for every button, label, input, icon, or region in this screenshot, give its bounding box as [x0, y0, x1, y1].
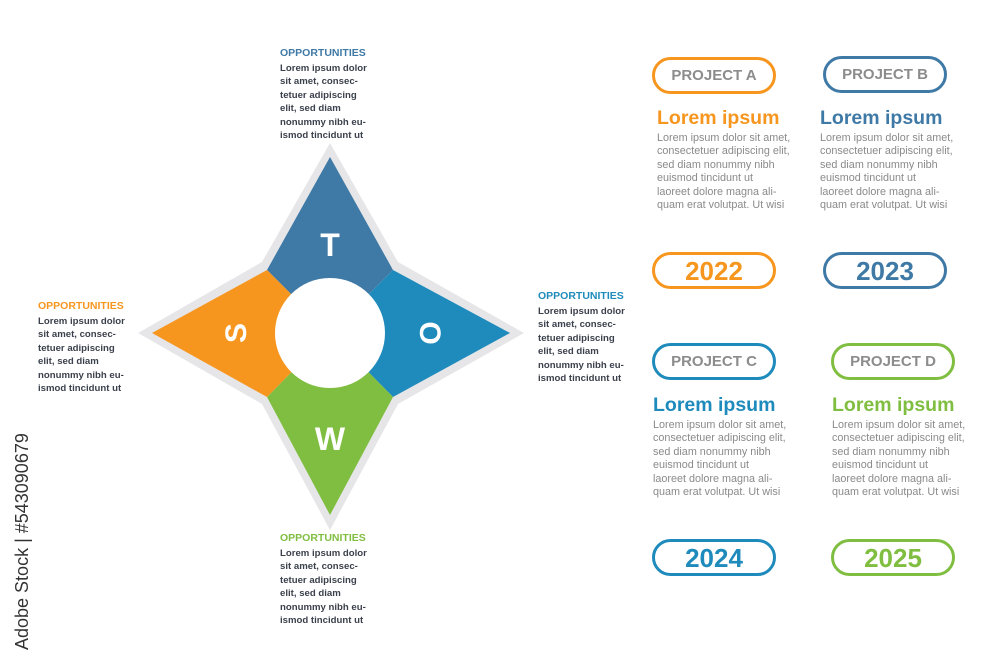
pill: project D: PROJECT D [850, 353, 936, 370]
card: project A text: euismod tincidunt ut [657, 172, 753, 184]
card: project A text: laoreet dolore magna ali- [657, 186, 776, 198]
text block: bottom opportunities: OPPORTUNITIES [280, 532, 366, 544]
pill: year 2023: 2023 [856, 256, 914, 286]
pill: year 2024: 2024 [685, 543, 743, 573]
card: project D text: Lorem ipsum dolor sit amet, [832, 419, 965, 431]
text block: top opportunities: tetuer adipiscing [280, 90, 357, 101]
text block: top opportunities: Lorem ipsum dolor [280, 63, 367, 74]
text block: right opportunities: sit amet, consec- [538, 319, 616, 330]
pill: project C: PROJECT C [671, 353, 757, 370]
card: project C text: consectetuer adipiscing elit, [653, 432, 786, 444]
text block: bottom opportunities: elit, sed diam [280, 588, 341, 599]
pill: project A [652, 57, 776, 94]
card: project C text: Lorem ipsum [653, 394, 775, 416]
segment S [152, 270, 330, 397]
card: project C text: Lorem ipsum dolor sit amet, [653, 419, 786, 431]
card: project B text: Lorem ipsum dolor sit amet, [820, 132, 953, 144]
text block: bottom opportunities: sit amet, consec- [280, 561, 358, 572]
segment O: O [413, 321, 446, 345]
card: project B text: consectetuer adipiscing elit, [820, 145, 953, 157]
card: project C text: sed diam nonummy nibh [653, 446, 771, 458]
segment W: W [315, 421, 346, 457]
segment S: S [220, 323, 253, 343]
card: project C text: laoreet dolore magna ali- [653, 473, 772, 485]
segment O [330, 270, 510, 397]
text block: bottom opportunities: Lorem ipsum dolor [280, 548, 367, 559]
card: project B text: quam erat volutpat. Ut wisi [820, 199, 947, 211]
segment T: T [320, 227, 340, 263]
text block: right opportunities: ismod tincidunt ut [538, 373, 621, 384]
text block: left opportunities [38, 300, 125, 394]
center circle [275, 278, 385, 388]
card: project C text: euismod tincidunt ut [653, 459, 749, 471]
card: project A text: consectetuer adipiscing elit, [657, 145, 790, 157]
pill: project B: PROJECT B [842, 66, 928, 83]
watermark: vertical stock id: Adobe Stock | #543090679 [12, 433, 32, 650]
card: project D text: Lorem ipsum [832, 394, 954, 416]
pill: year 2022: 2022 [685, 256, 743, 286]
text block: right opportunities: Lorem ipsum dolor [538, 306, 625, 317]
text block: top opportunities: OPPORTUNITIES [280, 47, 366, 59]
text block: top opportunities: nonummy nibh eu- [280, 117, 366, 128]
pill: year 2022 [652, 252, 776, 289]
text block: bottom opportunities [280, 532, 367, 626]
card: project D text [832, 394, 965, 498]
card: project C text: quam erat volutpat. Ut wisi [653, 486, 780, 498]
card: project A text: quam erat volutpat. Ut wisi [657, 199, 784, 211]
text block: right opportunities: tetuer adipiscing [538, 333, 615, 344]
card: project A text [657, 107, 790, 211]
card: project D text: quam erat volutpat. Ut wisi [832, 486, 959, 498]
text block: right opportunities: elit, sed diam [538, 346, 599, 357]
pill: project B [823, 56, 947, 93]
text block: left opportunities: elit, sed diam [38, 356, 99, 367]
card: project B text: Lorem ipsum [820, 107, 942, 129]
text block: left opportunities: OPPORTUNITIES [38, 300, 124, 312]
text block: top opportunities: sit amet, consec- [280, 76, 358, 87]
star outline shadow [138, 143, 524, 530]
segment T [267, 157, 393, 333]
text block: top opportunities: elit, sed diam [280, 103, 341, 114]
text block: left opportunities: tetuer adipiscing [38, 343, 115, 354]
text block: bottom opportunities: nonummy nibh eu- [280, 602, 366, 613]
pill: project D [831, 343, 955, 380]
pill: project A: PROJECT A [671, 67, 757, 84]
text block: left opportunities: Lorem ipsum dolor [38, 316, 125, 327]
pill: year 2023 [823, 252, 947, 289]
text block: right opportunities [538, 290, 625, 384]
card: project C text [653, 394, 786, 498]
card: project B text [820, 107, 953, 211]
card: project D text: sed diam nonummy nibh [832, 446, 950, 458]
pill: year 2025: 2025 [864, 543, 922, 573]
card: project D text: euismod tincidunt ut [832, 459, 928, 471]
card: project D text: consectetuer adipiscing elit, [832, 432, 965, 444]
pill: year 2024 [652, 539, 776, 576]
card: project A text: sed diam nonummy nibh [657, 159, 775, 171]
card: project B text: euismod tincidunt ut [820, 172, 916, 184]
text block: left opportunities: sit amet, consec- [38, 329, 116, 340]
text block: left opportunities: ismod tincidunt ut [38, 383, 121, 394]
pill: project C [652, 343, 776, 380]
card: project A text: Lorem ipsum [657, 107, 779, 129]
card: project D text: laoreet dolore magna ali- [832, 473, 951, 485]
pill: year 2025 [831, 539, 955, 576]
text block: left opportunities: nonummy nibh eu- [38, 370, 124, 381]
text block: top opportunities: ismod tincidunt ut [280, 130, 363, 141]
card: project B text: sed diam nonummy nibh [820, 159, 938, 171]
card: project B text: laoreet dolore magna ali- [820, 186, 939, 198]
text block: bottom opportunities: tetuer adipiscing [280, 575, 357, 586]
segment W [267, 333, 393, 515]
text block: top opportunities [280, 47, 367, 141]
text block: right opportunities: nonummy nibh eu- [538, 360, 624, 371]
text block: right opportunities: OPPORTUNITIES [538, 290, 624, 302]
text block: bottom opportunities: ismod tincidunt ut [280, 615, 363, 626]
card: project A text: Lorem ipsum dolor sit amet, [657, 132, 790, 144]
